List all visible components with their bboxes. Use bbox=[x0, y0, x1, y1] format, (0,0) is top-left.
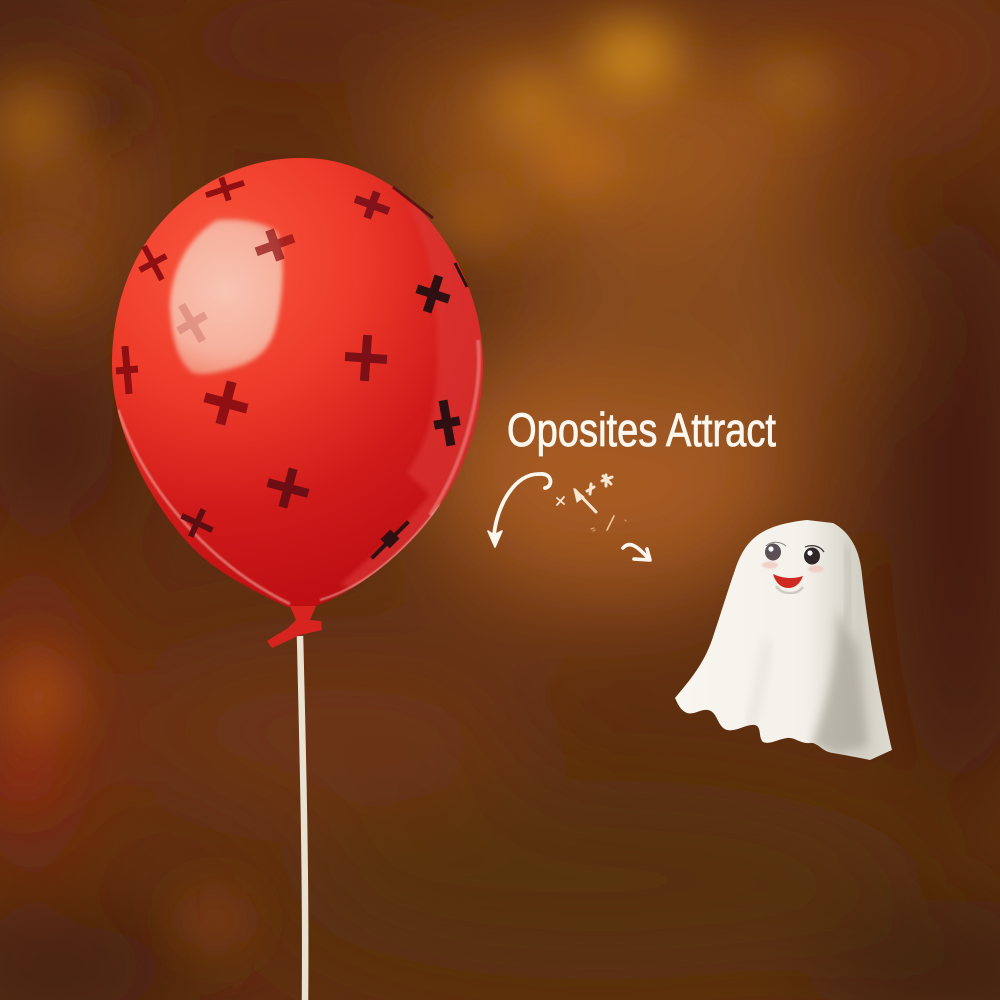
scattered charge marks bbox=[557, 475, 626, 531]
balloon string bbox=[300, 636, 305, 1000]
balloon highlight bbox=[170, 220, 283, 374]
icon: curved arrow down-left bbox=[488, 474, 550, 547]
balloon knot bbox=[267, 606, 322, 648]
balloon shading and rim reflection bbox=[118, 200, 510, 620]
balloon body bbox=[112, 158, 483, 607]
title: Oposites Attract bbox=[507, 403, 776, 456]
ghost body bbox=[675, 520, 892, 760]
red balloon with plus charges bbox=[112, 158, 510, 648]
ghost folds bbox=[750, 545, 868, 755]
ghost bbox=[675, 520, 892, 760]
icon: small arrow toward ghost bbox=[623, 545, 650, 560]
plus charges bbox=[114, 171, 467, 558]
ghost face bbox=[762, 542, 824, 593]
